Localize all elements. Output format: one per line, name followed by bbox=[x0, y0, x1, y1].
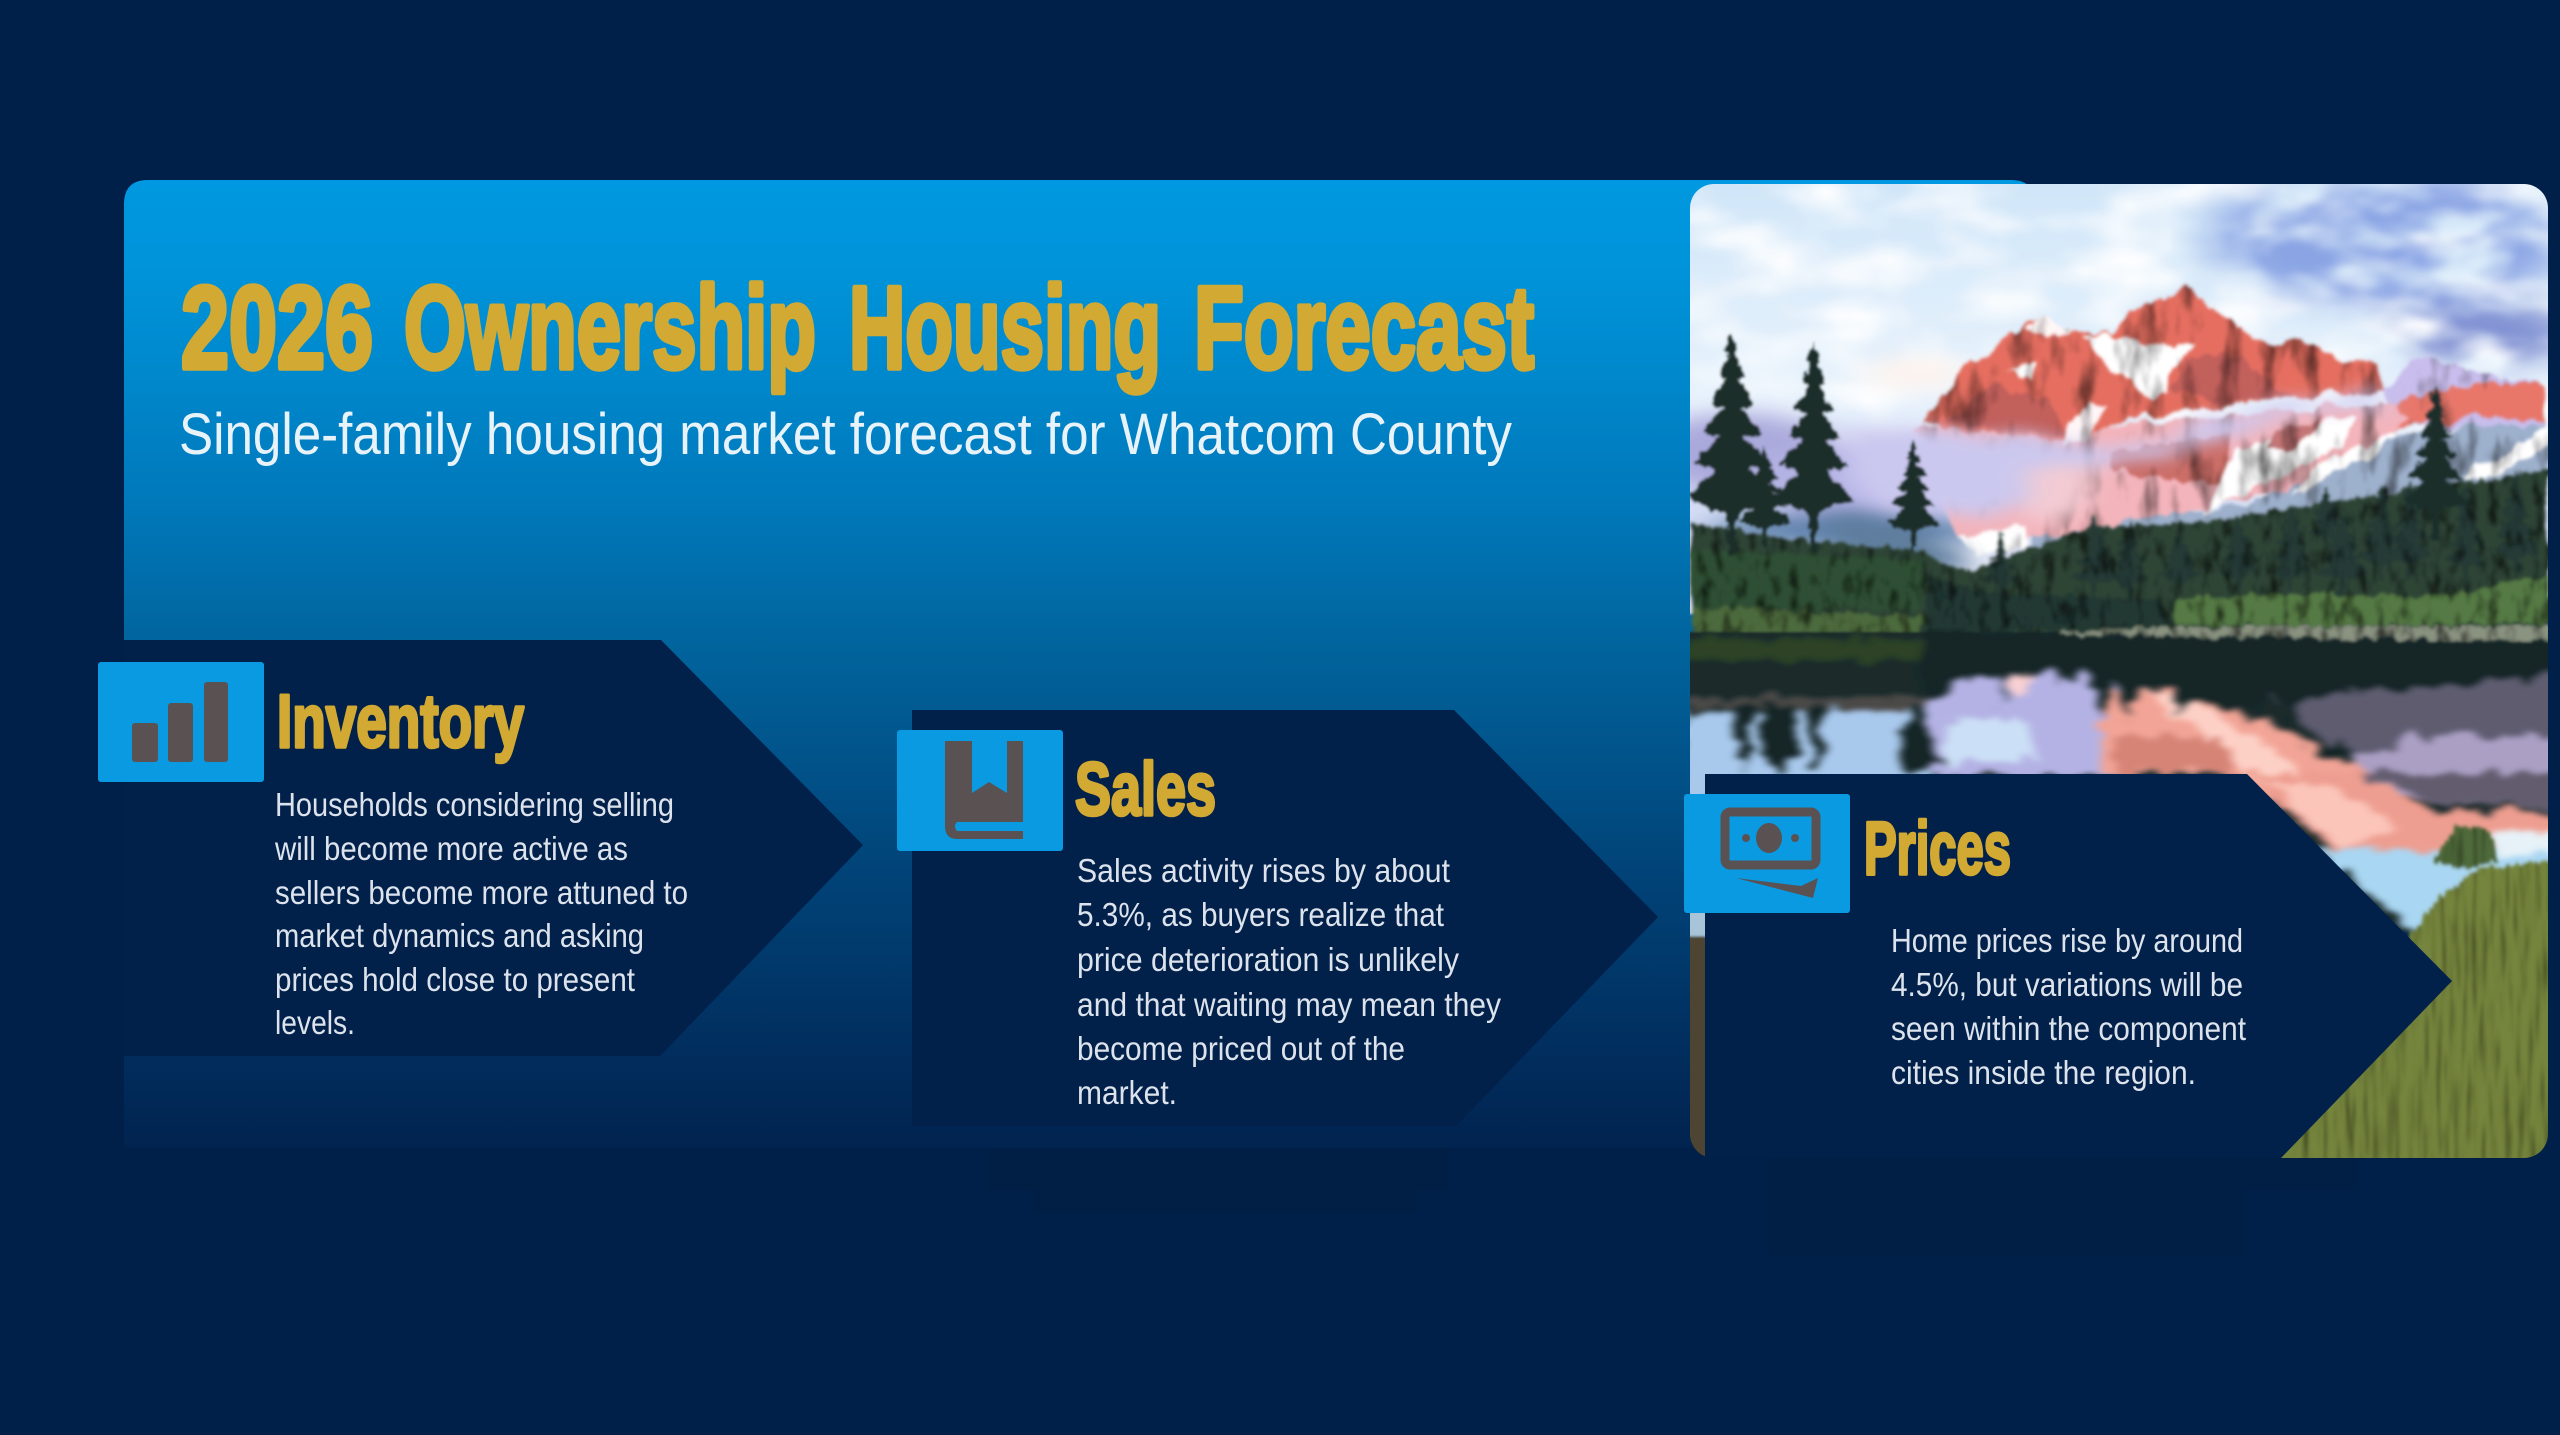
heading: title: 2026 bbox=[181, 262, 373, 393]
heading: title: Ownership bbox=[404, 262, 816, 393]
photo: mountain and lake landscape bbox=[1641, 173, 2560, 1172]
panel: inventory bbox=[98, 640, 863, 1056]
text block: and that waiting may mean they bbox=[1077, 986, 1501, 1023]
text block: 5.3%, as buyers realize that bbox=[1077, 896, 1444, 933]
lake bbox=[1680, 625, 2560, 932]
icon: book with bookmark bbox=[897, 730, 1063, 851]
shoreline bbox=[2062, 625, 2560, 642]
lower sky haze bbox=[1690, 355, 1972, 554]
icon: banknote bbox=[1684, 794, 1850, 913]
heading: title: Housing bbox=[849, 262, 1161, 393]
text block: become priced out of the bbox=[1077, 1030, 1405, 1067]
left photo sliver bbox=[1690, 913, 1705, 1156]
heading: Prices bbox=[1864, 806, 2011, 890]
text block: sellers become more attuned to bbox=[275, 874, 688, 911]
sky bbox=[1680, 174, 2558, 614]
text block: Sales activity rises by about bbox=[1077, 852, 1450, 889]
periwinkle clouds bbox=[2208, 173, 2560, 367]
text block: market. bbox=[1077, 1074, 1177, 1111]
text block: market dynamics and asking bbox=[275, 917, 644, 954]
panel: sales bbox=[897, 710, 1658, 1126]
arrow shape bbox=[912, 710, 1658, 1126]
arrow shape bbox=[1705, 774, 2452, 1158]
cloud band bbox=[1820, 397, 2393, 573]
text block: price deterioration is unlikely bbox=[1077, 941, 1459, 978]
heading: Inventory bbox=[277, 679, 524, 763]
grass bbox=[2281, 822, 2548, 1158]
text block: cities inside the region. bbox=[1891, 1054, 2196, 1091]
arrow shape bbox=[124, 640, 863, 1056]
text block: will become more active as bbox=[274, 830, 628, 867]
text block bbox=[1891, 922, 2246, 1091]
panel: prices bbox=[1684, 774, 2452, 1158]
text block: seen within the component bbox=[1891, 1010, 2246, 1047]
text block bbox=[274, 786, 688, 1041]
text block: Households considering selling bbox=[275, 786, 674, 823]
text block: prices hold close to present bbox=[275, 961, 635, 998]
heading: title bbox=[181, 262, 1534, 393]
text block: levels. bbox=[275, 1004, 355, 1041]
mountain bbox=[1916, 287, 2548, 573]
heading: subtitle: Single-family housing market forecast for Whatcom County bbox=[179, 402, 1512, 467]
forest bbox=[1691, 467, 2548, 640]
blue gradient panel bbox=[124, 180, 2035, 1148]
heading: Sales bbox=[1075, 747, 1216, 831]
text block: 4.5%, but variations will be bbox=[1891, 966, 2243, 1003]
lower reflection bbox=[2247, 772, 2560, 936]
text block: Home prices rise by around bbox=[1891, 922, 2243, 959]
text block bbox=[1077, 852, 1501, 1111]
tall conifers bbox=[1687, 332, 2468, 555]
heading: title: Forecast bbox=[1194, 262, 1534, 393]
faint card shadows bbox=[988, 1143, 2358, 1255]
icon: bar chart bbox=[98, 662, 264, 782]
